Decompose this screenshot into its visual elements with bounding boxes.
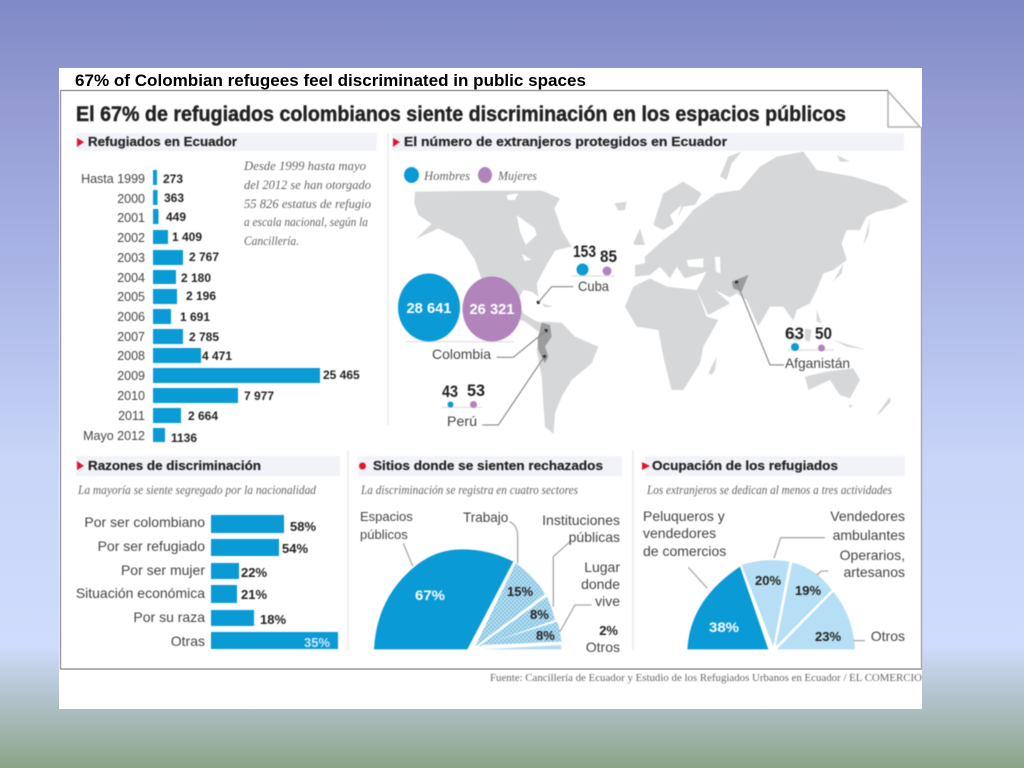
slide card: [59, 68, 922, 709]
panel: occupations: [642, 456, 905, 649]
callout: Peru: 43: [442, 382, 458, 401]
bar chart: reasons: [76, 514, 338, 650]
bar chart: refugees by year: 363: [164, 191, 184, 205]
pie chart: sites: 8%: [530, 607, 549, 622]
bar chart: reasons: Por ser refugiado: [98, 538, 205, 554]
callout: Colombia: 26 321: [470, 301, 514, 318]
pie chart: sites: Trabajo: [463, 510, 508, 525]
callout: Colombia: Colombia: [432, 346, 491, 362]
bar chart: refugees by year: 2006: [117, 310, 145, 324]
bar chart: refugees by year: 7 977: [244, 389, 274, 403]
bar chart: refugees by year: 2 664: [188, 409, 218, 423]
legend: Hombres: [423, 168, 470, 183]
callout: Colombia: 28 641: [406, 300, 452, 317]
bar chart: refugees by year: 2 767: [189, 250, 219, 264]
text block: refugee note: [243, 159, 371, 248]
pie chart: sites: Otros: [586, 639, 620, 655]
bar chart: reasons: Por ser mujer: [121, 562, 205, 578]
panel: rejected sites: [358, 456, 622, 655]
bar chart: reasons: Por su raza: [133, 609, 205, 625]
heading: reasons: Razones de discriminación: [88, 459, 261, 473]
pie chart: sites: [360, 509, 620, 655]
pie chart: sites: 67%: [415, 587, 446, 603]
callout: Afganistan: Afganistán: [785, 355, 850, 371]
infographic content: [76, 91, 922, 684]
callout: Afganistan: [785, 324, 850, 371]
icon: folded corner: [888, 91, 920, 127]
callout: Colombia: [398, 274, 522, 362]
text block: refugee note: Cancillería.: [244, 234, 299, 248]
bar chart: refugees by year: 2007: [117, 330, 145, 344]
bar chart: refugees by year: 2003: [117, 251, 145, 265]
world map: Americas: [407, 191, 627, 434]
bar chart: refugees by year: 1 409: [172, 230, 202, 244]
bar chart: reasons: 21%: [241, 587, 267, 602]
world map: Europe, Asia, Africa, Oceania: [625, 152, 908, 415]
bar chart: refugees by year: 2004: [117, 271, 145, 285]
pie chart: sites: 8%: [536, 628, 555, 643]
bar chart: refugees by year: 2011: [118, 409, 145, 423]
bar chart: reasons: 18%: [260, 612, 286, 627]
bar chart: refugees by year: Hasta 1999: [81, 172, 145, 186]
pie chart: occupations: vendedores: [643, 525, 716, 541]
text block: refugee note: a escala nacional, según la: [244, 215, 368, 229]
callout: Cuba: 153: [573, 242, 596, 261]
callout: Cuba: 85: [600, 247, 617, 266]
source note: Fuente: Cancillería de Ecuador y Estudio de los Refugiados Urbanos en Ecuador / EL COMERCIO: [490, 673, 922, 684]
bar chart: refugees by year: 2005: [117, 290, 145, 304]
bar chart: refugees by year: 2 785: [189, 330, 219, 344]
callout: Cuba: [573, 242, 617, 294]
bar chart: refugees by year: 2000: [117, 192, 145, 206]
legend: [404, 167, 537, 183]
bar chart: refugees by year: 273: [163, 172, 183, 186]
pie chart: sites: 2%: [599, 623, 618, 638]
callout: Peru: 53: [467, 381, 485, 400]
bar chart: reasons: 54%: [282, 541, 308, 556]
pie chart: occupations: Otros: [871, 628, 905, 644]
pie chart: occupations: de comercios: [643, 543, 726, 559]
pie chart: occupations: 23%: [815, 629, 841, 644]
callout: Afganistan: 50: [815, 324, 832, 343]
pie chart: sites: vive: [595, 593, 620, 609]
heading: refugees: Refugiados en Ecuador: [88, 135, 237, 149]
callout: Peru: Perú: [447, 413, 477, 429]
pie chart: occupations: Peluqueros y: [643, 508, 725, 524]
pie chart: sites: públicas: [569, 529, 620, 545]
pie chart: occupations: 19%: [795, 583, 821, 598]
callout: Peru: [442, 381, 485, 429]
panel: protected foreigners map: [392, 133, 908, 434]
pie chart: sites: Lugar: [584, 559, 620, 575]
panel: refugees in Ecuador: [76, 133, 377, 445]
pie chart: occupations: ambulantes: [833, 527, 905, 543]
pie chart: occupations: 38%: [709, 619, 740, 635]
bar chart: refugees by year: 2008: [117, 349, 145, 363]
bar chart: reasons: Situación económica: [76, 585, 205, 601]
pie chart: occupations: Vendedores: [830, 508, 905, 524]
bar chart: refugees by year: Mayo 2012: [83, 429, 145, 443]
pie chart: sites: públicos: [360, 527, 408, 542]
heading: protected foreigners: El número de extranjeros protegidos en Ecuador: [404, 135, 727, 149]
pie chart: occupations: artesanos: [844, 564, 905, 580]
pie chart: sites: Espacios: [360, 509, 413, 524]
bar chart: refugees by year: 4 471: [202, 349, 232, 363]
bar chart: refugees by year: 1 691: [180, 310, 210, 324]
text block: refugee note: 55 826 estatus de refugio: [244, 197, 371, 211]
infographic heading: El 67% de refugiados colombianos siente discriminación en los espacios públicos: [76, 103, 846, 126]
callout: Afganistan: 63: [785, 324, 804, 343]
caption: sites: La discriminación se registra en cuatro sectores: [360, 483, 578, 497]
heading: sites: Sitios donde se sienten rechazados: [373, 459, 603, 473]
bar chart: refugees by year: 2001: [117, 211, 145, 225]
bar chart: refugees by year: [81, 170, 360, 445]
bar chart: reasons: 58%: [290, 519, 316, 534]
pie chart: sites: Instituciones: [542, 512, 620, 528]
caption: reasons: La mayoría se siente segregado por la nacionalidad: [77, 483, 317, 497]
text block: refugee note: Desde 1999 hasta mayo: [243, 159, 366, 173]
bar chart: reasons: 35%: [304, 635, 330, 650]
text block: refugee note: del 2012 se han otorgado: [244, 178, 371, 192]
bar chart: reasons: Por ser colombiano: [84, 514, 205, 530]
pie chart: occupations: Operarios,: [840, 547, 905, 563]
bar chart: refugees by year: 2 196: [186, 289, 216, 303]
pie chart: sites: 15%: [507, 584, 533, 599]
bar chart: refugees by year: 2 180: [181, 271, 211, 285]
heading: occupations: Ocupación de los refugiados: [652, 459, 838, 473]
bar chart: reasons: Otras: [171, 633, 205, 649]
bar chart: refugees by year: 2010: [117, 389, 145, 403]
callout: Cuba: Cuba: [578, 278, 609, 294]
pie chart: occupations: 20%: [755, 573, 781, 588]
bar chart: reasons: 22%: [241, 565, 267, 580]
bar chart: refugees by year: 1136: [171, 431, 197, 445]
legend: Mujeres: [497, 168, 537, 183]
bar chart: refugees by year: 25 465: [323, 368, 360, 382]
pie chart: sites: donde: [581, 576, 620, 592]
bar chart: refugees by year: 2009: [117, 369, 145, 383]
bar chart: refugees by year: 449: [166, 210, 186, 224]
slide title: 67% of Colombian refugees feel discriminated in public spaces: [75, 71, 586, 90]
caption: occupations: Los extranjeros se dedican al menos a tres actividades: [646, 483, 892, 497]
bar chart: refugees by year: 2002: [117, 231, 145, 245]
pie chart: occupations: [643, 508, 905, 649]
panel: reasons for discrimination: [76, 456, 340, 650]
